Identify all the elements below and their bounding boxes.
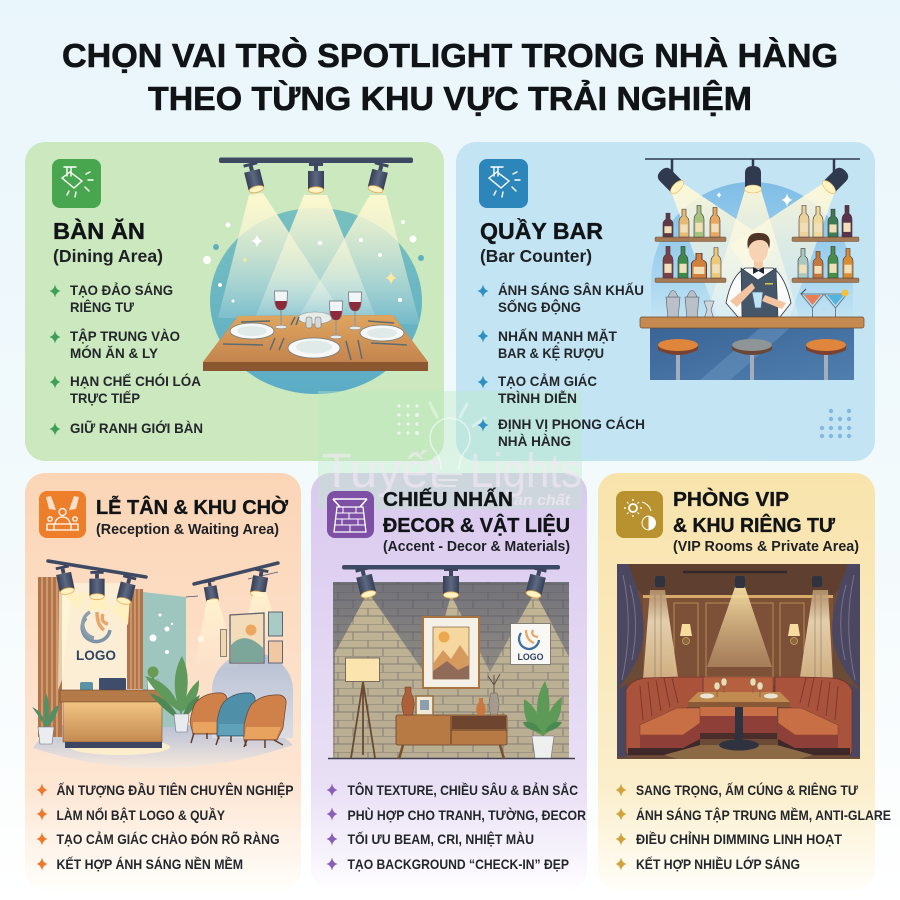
panel: reception xyxy=(25,473,301,890)
logo on reception wall: LOGO xyxy=(76,647,116,663)
list: dining points: MÓN ĂN & LY xyxy=(70,346,158,361)
watermark: Tuyết xyxy=(322,445,442,498)
list: bar points: TẠO CẢM GIÁC xyxy=(498,374,597,389)
illustration: dining table under spotlights xyxy=(203,158,428,394)
list: VIP points: KẾT HỢP NHIỀU LỚP SÁNG xyxy=(636,855,800,872)
potted plant xyxy=(523,681,562,758)
floor lamp xyxy=(346,658,380,758)
list: VIP points: SANG TRỌNG, ẤM CÚNG & RIÊNG TƯ xyxy=(636,781,858,798)
list: reception points: LÀM NỔI BẬT LOGO & QUẦY xyxy=(56,806,226,823)
list: bar points: ĐỊNH VỊ PHONG CÁCH xyxy=(498,417,645,432)
watermark: an chất xyxy=(514,492,571,509)
heading: bar: (Bar Counter) xyxy=(480,246,592,266)
title: THEO TỪNG KHU VỰC TRẢI NGHIỆM xyxy=(148,80,752,117)
list: dining points: HẠN CHẾ CHÓI LÓA xyxy=(70,374,201,389)
watermark xyxy=(318,391,582,509)
heading: reception xyxy=(96,495,289,538)
panel: dining area xyxy=(25,142,444,461)
list: reception points xyxy=(36,781,294,872)
list: accent points: TẠO BACKGROUND “CHECK-IN” ĐẸP xyxy=(348,856,569,872)
heading: dining: (Dining Area) xyxy=(53,246,163,266)
logo board: LOGO xyxy=(518,652,544,662)
list: dining points: TẬP TRUNG VÀO xyxy=(70,329,180,344)
list: dining points xyxy=(50,283,203,436)
watermark: Lights xyxy=(470,445,582,498)
heading: VIP: (VIP Rooms & Private Area) xyxy=(673,539,859,555)
heading: reception: (Reception & Waiting Area) xyxy=(96,522,279,538)
wall pictures xyxy=(220,612,282,663)
list: accent points: TỐI ƯU BEAM, CRI, NHIỆT MÀU xyxy=(348,830,534,847)
icon: brick wall spotlight xyxy=(327,491,374,538)
illustration: bartender at counter xyxy=(640,159,864,380)
heading: accent decor: ĐECOR & VẬT LIỆU xyxy=(383,513,570,537)
list: dining points: GIỮ RANH GIỚI BÀN xyxy=(70,421,203,436)
list: bar points: ÁNH SÁNG SÂN KHẤU xyxy=(498,283,644,298)
heading: VIP xyxy=(673,487,859,555)
list: bar points: SỐNG ĐỘNG xyxy=(498,300,581,315)
icon: green spotlight xyxy=(52,159,101,208)
heading: accent decor xyxy=(383,488,570,555)
heading: accent decor: (Accent - Decor & Materials) xyxy=(383,539,570,555)
list: reception points: TẠO CẢM GIÁC CHÀO ĐÓN RÕ RÀNG xyxy=(56,830,280,847)
logo on reception wall xyxy=(76,612,116,663)
list: bar points xyxy=(478,283,645,449)
icon: dimming xyxy=(616,491,663,538)
panel: VIP rooms xyxy=(598,473,891,890)
illustration: brick wall with decor xyxy=(328,565,575,759)
heading: accent decor: CHIẾU NHẤN xyxy=(383,488,513,511)
icon: blue spotlight xyxy=(479,159,528,208)
list: bar points: NHÀ HÀNG xyxy=(498,434,571,449)
heading: dining: BÀN ĂN xyxy=(53,217,145,244)
list: accent points: TÔN TEXTURE, CHIỀU SÂU & BẢN SẮC xyxy=(348,781,578,798)
illustration: VIP booth xyxy=(617,564,860,759)
logo board xyxy=(510,624,550,664)
list: VIP points xyxy=(616,781,891,872)
list: VIP points: ĐIỀU CHỈNH DIMMING LINH HOẠT xyxy=(636,831,842,847)
heading: VIP: PHÒNG VIP xyxy=(673,487,789,511)
list: reception points: ẤN TƯỢNG ĐẦU TIÊN CHUYÊN NGHIỆP xyxy=(56,781,294,798)
list: dining points: TẠO ĐẢO SÁNG xyxy=(70,283,173,298)
heading: dining xyxy=(53,217,163,266)
illustration: reception and waiting area xyxy=(32,561,293,768)
list: dining points: RIÊNG TƯ xyxy=(70,300,135,315)
heading: bar xyxy=(480,217,603,266)
panel: accent decor xyxy=(311,473,587,890)
list: bar points: BAR & KỆ RƯỢU xyxy=(498,346,604,361)
heading: VIP: & KHU RIÊNG TƯ xyxy=(673,513,835,537)
list: accent points: PHÙ HỢP CHO TRANH, TƯỜNG, ĐECOR xyxy=(348,806,586,823)
title xyxy=(62,37,838,117)
list: accent points xyxy=(326,781,586,872)
decoration: dots xyxy=(820,409,851,438)
framed picture xyxy=(423,617,479,688)
icon: reception xyxy=(39,491,86,538)
list: bar points: TRÌNH DIỄN xyxy=(498,391,577,406)
heading: reception: LỄ TÂN & KHU CHỜ xyxy=(96,495,289,519)
list: bar points: NHẤN MẠNH MẶT xyxy=(498,329,618,344)
reception desk xyxy=(60,678,166,748)
waiting chairs xyxy=(190,693,286,748)
title: CHỌN VAI TRÒ SPOTLIGHT TRONG NHÀ HÀNG xyxy=(62,37,838,74)
panel: bar counter xyxy=(456,142,875,461)
heading: bar: QUẦY BAR xyxy=(480,217,603,244)
sideboard with vases xyxy=(396,674,507,759)
list: reception points: KẾT HỢP ÁNH SÁNG NỀN MỀM xyxy=(56,856,243,872)
list: dining points: TRỰC TIẾP xyxy=(70,391,140,406)
